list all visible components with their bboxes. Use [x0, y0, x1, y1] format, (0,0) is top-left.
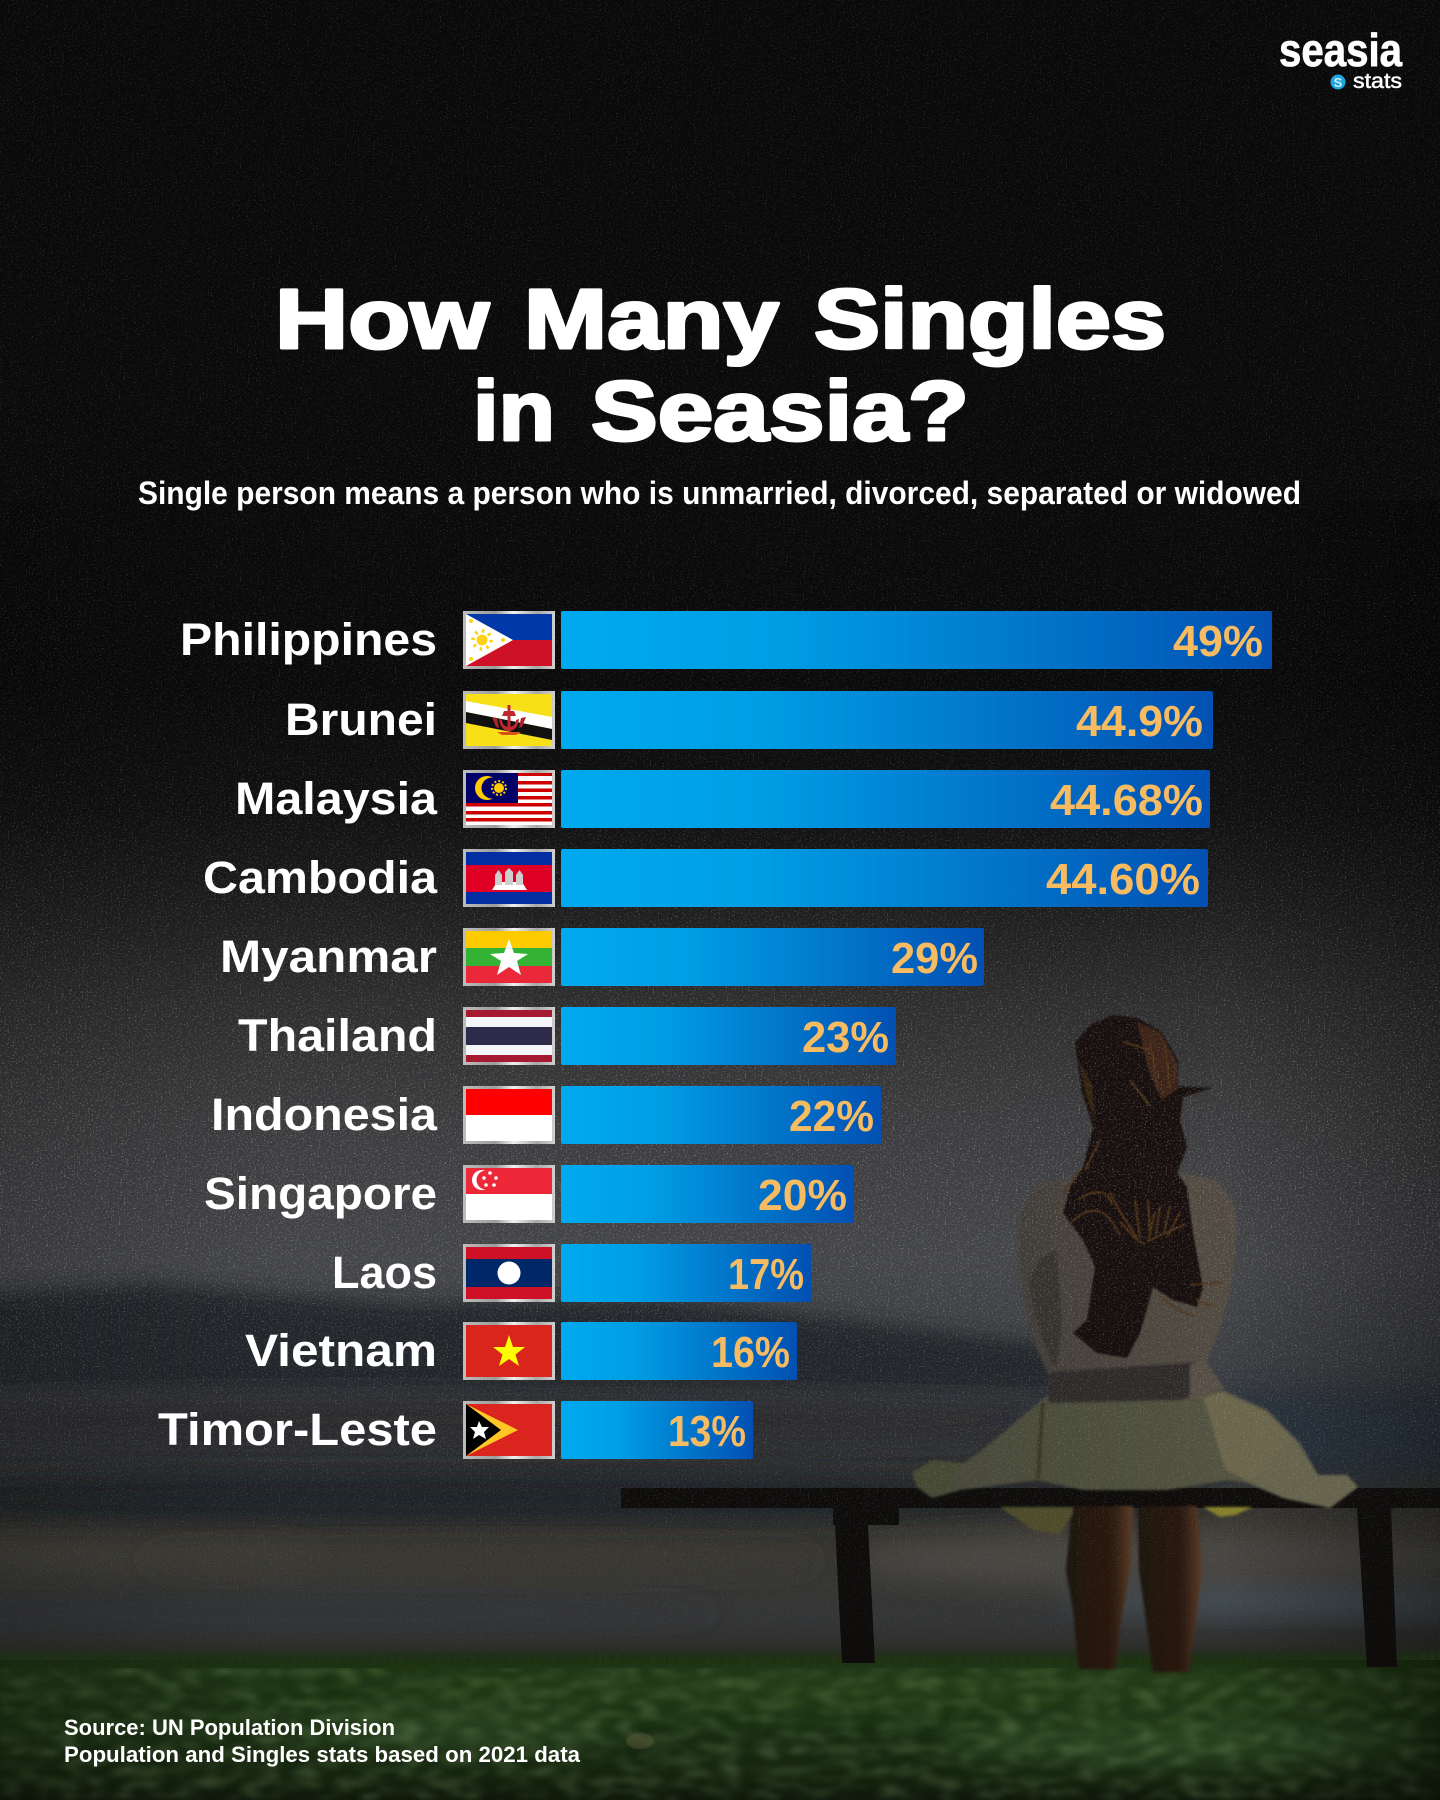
woman's legs [1066, 1506, 1202, 1672]
row: Brunei [285, 691, 1213, 749]
row: Cambodia: 44.60% [1046, 855, 1200, 904]
row: Cambodia [203, 849, 1208, 907]
woman's sweater [1018, 1170, 1237, 1403]
row: Thailand: Thailand [238, 1010, 437, 1061]
row: Malaysia: Malaysia [235, 773, 438, 824]
row: Laos: 17% [728, 1250, 804, 1299]
woman's skirt [912, 1390, 1358, 1535]
title: Many [524, 272, 779, 366]
title: Seasia? [591, 364, 969, 458]
woman's hair [1063, 1015, 1222, 1358]
grass [0, 1645, 1440, 1800]
row: Indonesia: Indonesia [211, 1089, 438, 1140]
row: Laos: Laos [332, 1247, 437, 1298]
chart: share of singles by country [158, 611, 1272, 1459]
photo: bench and seated woman [621, 1015, 1440, 1672]
logo: seasia stats [1279, 24, 1402, 93]
source note: Population and Singles stats based on 2021 data [64, 1742, 581, 1767]
row: Timor-Leste [158, 1401, 753, 1459]
row: Philippines: 49% [1173, 617, 1263, 666]
row: Brunei: Brunei [285, 694, 437, 745]
row: Malaysia: 44.68% [1050, 776, 1203, 825]
row: Laos [332, 1244, 811, 1302]
row: Cambodia: Cambodia [203, 852, 438, 903]
bench [621, 1488, 1440, 1667]
row: Timor-Leste: 13% [668, 1407, 746, 1456]
logo subtitle: stats [1353, 70, 1402, 93]
row: Timor-Leste: Timor-Leste [158, 1404, 437, 1455]
row: Vietnam: 16% [711, 1328, 790, 1377]
row: Brunei: 44.9% [1076, 697, 1203, 746]
logo globe icon: S [1334, 75, 1343, 90]
row: Singapore: 20% [758, 1171, 847, 1220]
title: Singles [814, 272, 1166, 366]
subtitle: Single person means a person who is unmarried, divorced, separated or widowed [138, 475, 1301, 511]
row: Indonesia [211, 1086, 881, 1144]
logo wordmark: seasia [1279, 24, 1402, 76]
row: Singapore: Singapore [204, 1168, 437, 1219]
row: Thailand: 23% [802, 1013, 889, 1062]
row: Myanmar: 29% [891, 934, 978, 983]
row: Philippines: Philippines [180, 614, 437, 665]
source note: Source: UN Population Division [64, 1715, 395, 1740]
title: in [473, 364, 555, 458]
row: Myanmar: Myanmar [220, 931, 437, 982]
title [275, 272, 1166, 458]
row: Myanmar [220, 928, 984, 986]
row: Vietnam [245, 1322, 797, 1380]
title: How [275, 272, 490, 366]
row: Singapore [204, 1165, 854, 1223]
row: Indonesia: 22% [789, 1092, 874, 1141]
row: Malaysia [235, 770, 1210, 828]
row: Thailand [238, 1007, 896, 1065]
source note [64, 1715, 581, 1767]
row: Vietnam: Vietnam [245, 1325, 437, 1376]
row: Philippines [180, 611, 1272, 669]
